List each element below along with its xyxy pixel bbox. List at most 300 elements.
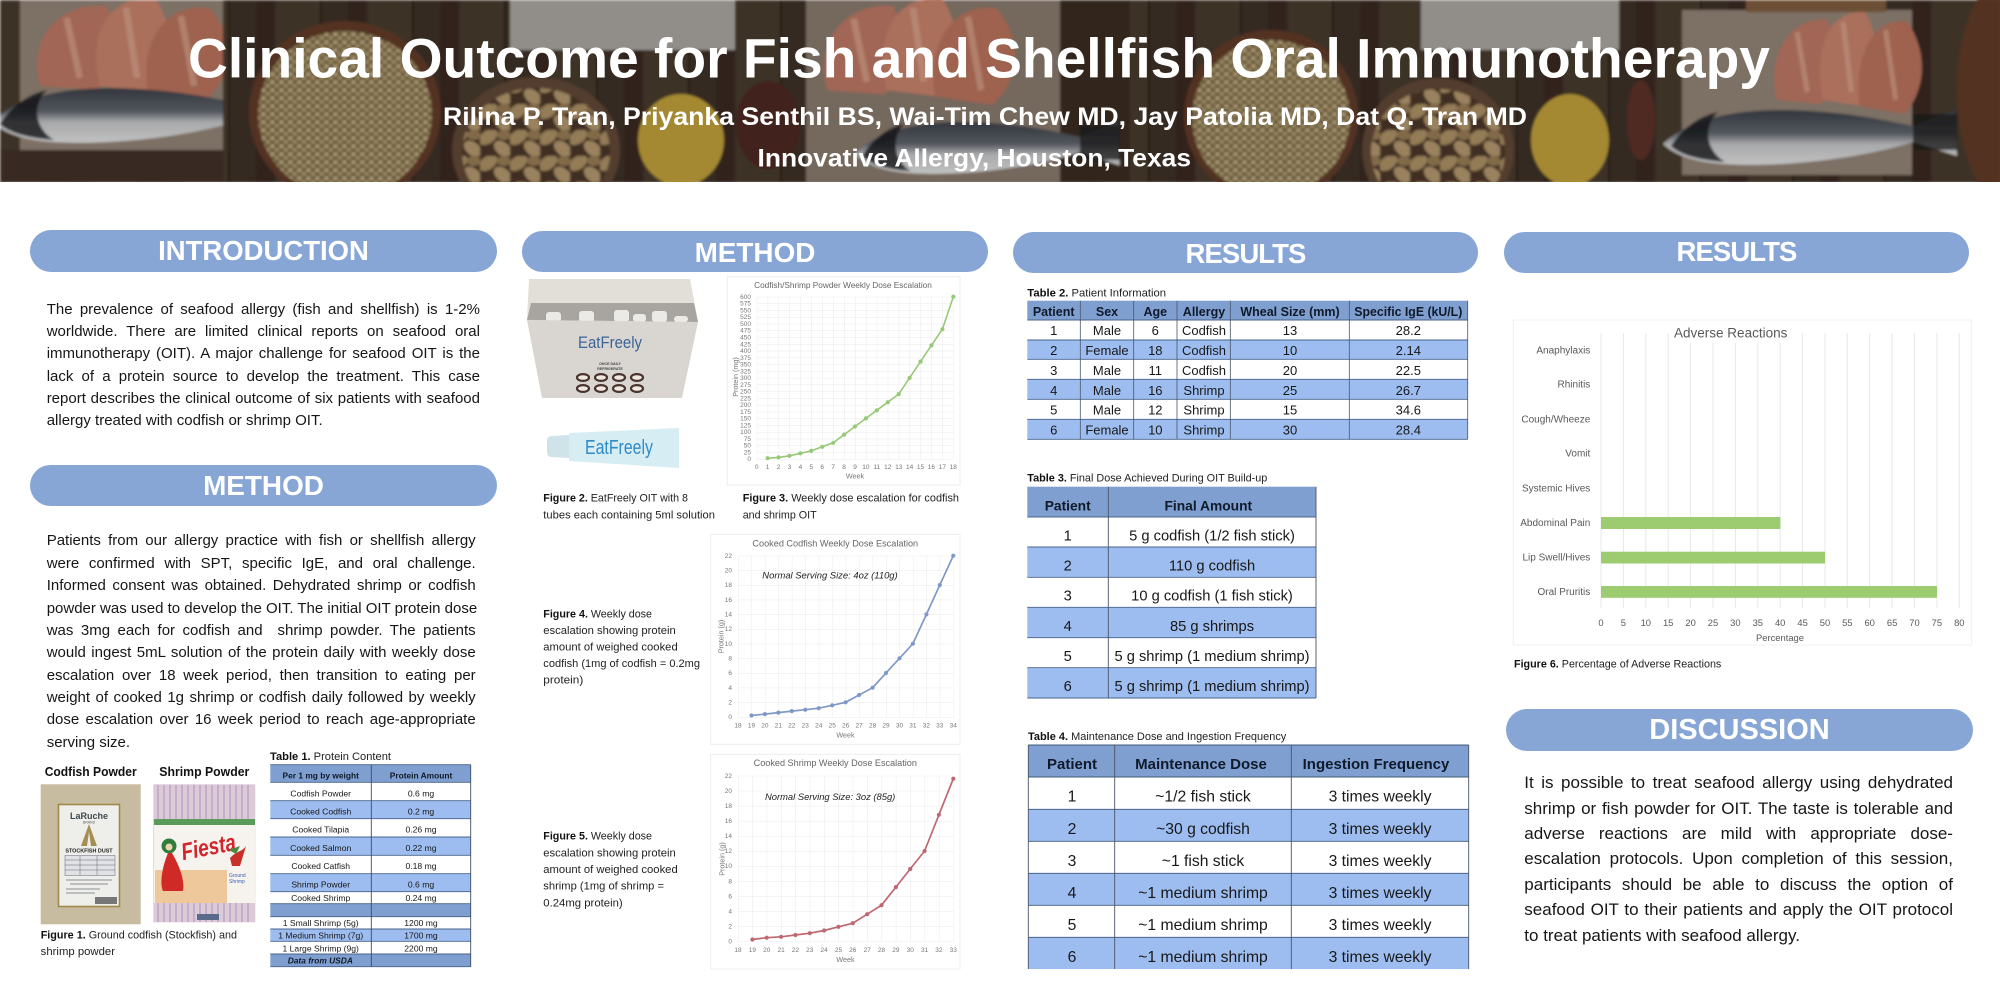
table 2: patient information: 15: [1283, 403, 1297, 418]
x axis labels: 31: [909, 722, 917, 729]
table 1: protein content: 1700 mg: [404, 931, 438, 941]
y axis labels: 20: [725, 788, 732, 795]
chart title: Adverse Reactions: [1674, 325, 1788, 340]
table 1: protein content: 0.26 mg: [405, 825, 437, 835]
table 4: maintenance dose and ingestion frequency: 2: [1068, 821, 1076, 838]
y axis labels: 50: [744, 443, 751, 450]
table 4: maintenance dose and ingestion frequency: ~1 fish stick: [1162, 853, 1244, 870]
tile 2 board, shrimp and fish: [804, 0, 1062, 182]
x axis labels: 9: [853, 464, 857, 471]
y axis labels: 12: [725, 626, 732, 633]
peanut bowl 1: [451, 76, 620, 182]
x axis labels: 30: [907, 947, 914, 954]
text block: discussion: shrimp or fish powder for OIT. The taste is tolerable and: [1524, 798, 1953, 818]
table 4: maintenance dose and ingestion frequency: 3 times weekly: [1329, 885, 1432, 902]
milk bottle 1: [510, 0, 735, 50]
text block: discussion: It is possible to treat seafood allergy using dehydrated: [1524, 773, 1953, 792]
table 1: protein content: [270, 751, 472, 968]
caption: figure 4: codfish (1mg of codfish = 0.2mg: [543, 658, 700, 670]
table 2: patient information: Allergy: [1183, 305, 1225, 319]
x axis labels: 60: [1864, 617, 1875, 628]
y axis labels: [725, 773, 732, 946]
y axis labels: 275: [740, 382, 751, 389]
table 1: protein content: 0.24 mg: [405, 893, 437, 903]
category labels: Cough/Wheeze: [1521, 414, 1591, 425]
axis titles: Week: [846, 472, 865, 481]
x axis labels: 10: [1641, 617, 1651, 628]
table 2: patient information: 6: [1050, 423, 1057, 438]
annotation: serving size: Normal Serving Size: 3oz (85g): [765, 792, 895, 803]
caption: figure 3: Figure 3. Weekly dose escalation for codfish: [743, 493, 959, 505]
text block: introduction: report describes the clinical outcome of six patients with seafood: [47, 390, 480, 407]
table 1: protein content: 0.22 mg: [405, 843, 437, 853]
axis titles: [716, 620, 855, 739]
text block: discussion: escalation protocols. Upon completion of this session,: [1524, 849, 1953, 868]
text block: method: Patients from our allergy practice with fish or shellfish allergy: [47, 532, 476, 549]
heading: introduction: [30, 230, 497, 272]
banner: food photo header with title: [0, 0, 2000, 182]
caption: figure 4: escalation showing protein: [543, 625, 676, 637]
text block: method: powder was used to develop the OIT. The initial OIT protein dose: [47, 600, 477, 617]
table 1: protein content: Cooked Catfish: [291, 861, 350, 871]
heading: method, left column: [30, 465, 497, 506]
table 3: final dose achieved: Table 3. Final Dose Achieved During OIT Build-up: [1027, 473, 1267, 485]
x axis labels: 30: [896, 722, 903, 729]
table 2: patient information: 10: [1283, 343, 1297, 358]
y axis labels: 18: [725, 803, 732, 810]
text block: introduction: worldwide. There are limited clinical reports on seafood oral: [47, 323, 480, 340]
table 2: patient information: 25: [1283, 383, 1297, 398]
photo: box: [527, 279, 698, 398]
y axis labels: 475: [740, 328, 751, 335]
axis titles: Protein (g): [716, 620, 726, 653]
table 2: patient information: Patient: [1033, 305, 1075, 319]
photo: fiesta ground shrimp package: Shrimp: [229, 879, 245, 885]
y axis labels: 14: [725, 833, 732, 840]
table 2: patient information: Male: [1093, 363, 1121, 378]
table 1: protein content: Cooked Salmon: [290, 843, 351, 853]
photo: stockfish dust package: STOCKFISH DUST: [65, 848, 113, 854]
y axis labels: 100: [740, 429, 751, 436]
chart: figure 4 cooked codfish weekly dose escalation: [710, 534, 960, 745]
x axis labels: 2: [777, 464, 781, 471]
tile 1 board, shrimp and fish: [0, 0, 226, 182]
heading: results, third column: RESULTS: [1185, 238, 1306, 269]
caption: figure 2: [543, 493, 715, 521]
y axis labels: 14: [725, 612, 732, 619]
x axis labels: 25: [1708, 617, 1718, 628]
category labels: Anaphylaxis: [1536, 345, 1590, 356]
table 1: protein content: Data from USDA: [288, 956, 353, 966]
caption: figure 1: Figure 1. Ground codfish (Stockfish) and: [41, 929, 237, 941]
line series: [752, 556, 953, 716]
axis titles: [731, 357, 865, 481]
x axis labels: 16: [928, 464, 935, 471]
x axis labels: 26: [849, 947, 857, 954]
photo: fiesta ground shrimp package: Fiesta: [179, 829, 238, 866]
text block: method: Informed consent was obtained. Dehydrated shrimp or codfish: [47, 577, 476, 594]
table 2: patient information: 11: [1149, 363, 1162, 378]
y axis labels: 600: [740, 294, 751, 301]
soy bowl 2: [1183, 29, 1358, 182]
y axis labels: 6: [728, 670, 732, 677]
x axis labels: 10: [862, 464, 870, 471]
x axis labels: 8: [842, 464, 846, 471]
x axis labels: 22: [788, 722, 796, 729]
x axis labels: 29: [882, 722, 890, 729]
chart title: Codfish/Shrimp Powder Weekly Dose Escalation: [754, 281, 932, 290]
table 2: patient information: 28.2: [1396, 323, 1421, 338]
y axis labels: 200: [740, 402, 751, 409]
x axis labels: 0: [755, 464, 759, 471]
category labels: Systemic Hives: [1522, 483, 1590, 494]
x axis labels: 22: [792, 947, 799, 954]
table 2: patient information: 20: [1283, 363, 1297, 378]
y axis labels: [740, 294, 751, 463]
text block: method: escalation over 18 week period, then transition to eating per: [47, 667, 476, 684]
y axis labels: 525: [740, 314, 751, 321]
x axis labels: 21: [777, 947, 785, 954]
table 3: final dose achieved: 4: [1064, 619, 1072, 635]
table 3: final dose achieved: 10 g codfish (1 fish stick): [1131, 589, 1293, 605]
x axis labels: [1598, 617, 1965, 643]
text block: discussion: to treat patients with seafood allergy.: [1524, 926, 1800, 945]
table 1: protein content: Protein Amount: [390, 770, 452, 780]
table 2: patient information: Male: [1093, 403, 1121, 418]
table 4: maintenance dose and ingestion frequency: Ingestion Frequency: [1303, 756, 1450, 773]
y axis labels: 8: [728, 878, 732, 885]
y axis labels: 125: [740, 422, 751, 429]
photo: stockfish dust package: [41, 784, 141, 924]
x axis labels: 70: [1909, 617, 1920, 628]
table 3: final dose achieved: 5: [1064, 649, 1072, 665]
caption: figure 5: 0.24mg protein): [543, 897, 623, 909]
table 2: patient information: Shrimp: [1183, 403, 1225, 418]
x axis labels: 20: [763, 947, 771, 954]
photo: stockfish dust package: LaRuche: [70, 811, 108, 821]
table 1: protein content: Cooked Codfish: [290, 807, 351, 817]
y axis labels: 425: [740, 341, 751, 348]
x axis labels: 17: [939, 464, 946, 471]
table 2: patient information: Wheal Size (mm): [1240, 305, 1340, 319]
photo: fiesta ground shrimp package: [153, 784, 255, 922]
text block: discussion: participants should be able to discuss the option of: [1524, 875, 1953, 894]
table 4: maintenance dose and ingestion frequency: ~30 g codfish: [1156, 821, 1250, 838]
caption: figure 2: Figure 2. EatFreely OIT with 8: [543, 493, 688, 505]
table 2: patient information: Age: [1143, 305, 1167, 319]
text block: method: [46, 532, 477, 751]
table 1: protein content: 1 Medium Shrimp (7g): [278, 931, 363, 941]
x axis labels: 35: [1753, 617, 1763, 628]
text block: method: would ingest 5mL solution of the protein daily with weekly dose: [47, 644, 476, 661]
y axis labels: [725, 553, 732, 721]
table 4: maintenance dose and ingestion frequency: ~1 medium shrimp: [1138, 885, 1268, 902]
table 2: patient information: Table 2. Patient Information: [1027, 288, 1166, 300]
y axis labels: 0: [728, 714, 732, 721]
caption: figure 4: Figure 4. Weekly dose: [543, 608, 652, 620]
x axis labels: 45: [1797, 617, 1808, 628]
x axis labels: 21: [775, 722, 782, 729]
chart: figure 5 cooked shrimp weekly dose escalation: [710, 754, 960, 970]
table 2: patient information: [1027, 288, 1468, 440]
bars: [1601, 517, 1937, 598]
x axis labels: 29: [892, 947, 900, 954]
x axis labels: 12: [884, 464, 892, 471]
table 1: protein content: Codfish Powder: [290, 788, 351, 798]
table 3: final dose achieved: 3: [1064, 589, 1072, 605]
heading: method, second column: [522, 231, 988, 272]
line series: [752, 779, 953, 940]
y axis labels: 4: [728, 908, 732, 915]
table 1: protein content: Shrimp Powder: [291, 879, 350, 889]
caption: figure 5: amount of weighed cooked: [543, 864, 678, 876]
heading: results, fourth column: RESULTS: [1676, 236, 1796, 267]
x axis labels: 23: [802, 722, 809, 729]
table 3: final dose achieved: 110 g codfish: [1169, 559, 1255, 575]
figure 2: EatFreely box and tube: [527, 279, 715, 521]
table 2: patient information: Female: [1085, 423, 1129, 438]
table 4: maintenance dose and ingestion frequency: 3 times weekly: [1329, 789, 1432, 806]
table 3: final dose achieved: 5 g shrimp (1 medium shrimp): [1114, 679, 1310, 695]
table 2: patient information: Male: [1093, 383, 1121, 398]
x axis labels: 6: [820, 464, 824, 471]
x axis labels: [734, 947, 957, 954]
table 4: maintenance dose and ingestion frequency: 5: [1068, 917, 1077, 934]
table 2: patient information: 2.14: [1396, 343, 1421, 358]
milk bottle 2: [1421, 0, 1619, 50]
y axis labels: 300: [740, 375, 751, 382]
table 3: final dose achieved: Patient: [1045, 498, 1091, 513]
x axis labels: 26: [842, 722, 850, 729]
caption: figure 4: amount of weighed cooked: [543, 642, 678, 654]
x axis labels: 75: [1932, 617, 1942, 628]
x axis labels: 5: [1621, 617, 1626, 628]
y axis labels: 575: [740, 301, 751, 308]
table 3: final dose achieved: 6: [1064, 679, 1072, 695]
heading: discussion: DISCUSSION: [1649, 714, 1830, 746]
axis titles: [718, 842, 855, 964]
table 3: final dose achieved: Final Amount: [1164, 498, 1253, 513]
x axis labels: 24: [815, 722, 823, 729]
y axis labels: 18: [725, 582, 732, 589]
x axis labels: 33: [950, 947, 957, 954]
y axis labels: 325: [740, 368, 751, 375]
y axis labels: 2: [728, 923, 732, 930]
x axis labels: 18: [734, 722, 742, 729]
table 2: patient information: 16: [1148, 383, 1163, 398]
x axis labels: 19: [748, 722, 755, 729]
nuts 1: [736, 81, 800, 169]
text block: method: was 3mg each for codfish and shrimp powder. The patients: [47, 622, 476, 639]
table 4: maintenance dose and ingestion frequency: 6: [1068, 949, 1077, 966]
x axis labels: 28: [878, 947, 885, 954]
y axis labels: 225: [740, 395, 751, 402]
table 2: patient information: 22.5: [1396, 363, 1421, 378]
table 2: patient information: Shrimp: [1183, 423, 1225, 438]
x axis labels: 34: [950, 722, 957, 729]
x axis labels: 40: [1775, 617, 1785, 628]
category labels: Oral Pruritis: [1538, 587, 1590, 598]
food photo background: [0, 0, 2000, 182]
table 1: protein content: Table 1. Protein Content: [270, 751, 392, 763]
x axis labels: 30: [1730, 617, 1741, 628]
category labels: Vomit: [1565, 449, 1591, 460]
table 3: final dose achieved: 5 g shrimp (1 medium shrimp): [1114, 649, 1310, 665]
y axis labels: 550: [740, 307, 751, 314]
table 1: protein content: 0.2 mg: [408, 807, 434, 817]
table 4: maintenance dose and ingestion frequency: 4: [1068, 885, 1077, 902]
x axis labels: [734, 722, 957, 729]
y axis labels: 6: [728, 893, 732, 900]
photo: box: ONCE DAILY: [599, 362, 622, 366]
caption: figure 5: [543, 831, 678, 909]
text block: method: were confirmed with SPT, specific IgE, and oral challenge.: [47, 555, 476, 572]
table 3: final dose achieved: [1027, 473, 1316, 698]
x axis labels: 3: [788, 464, 792, 471]
table 2: patient information: Specific IgE (kU/L): [1354, 305, 1462, 319]
authors: Rilina P. Tran, Priyanka Senthil BS, Wai-Tim Chew MD, Jay Patolia MD, Dat Q. Tran MD: [443, 103, 1527, 131]
label: codfish powder: Codfish Powder: [45, 765, 137, 779]
table 2: patient information: 26.7: [1396, 383, 1421, 398]
table 2: patient information: 13: [1283, 323, 1297, 338]
text block: introduction: immunotherapy (OIT). A major challenge for seafood OIT is the: [47, 345, 480, 362]
table 2: patient information: 10: [1148, 423, 1163, 438]
axis titles: Week: [836, 730, 855, 739]
caption: figure 4: [543, 608, 700, 687]
caption: figure 1: shrimp powder: [41, 946, 115, 958]
x axis labels: 7: [831, 464, 835, 471]
chart: figure 3 powder weekly dose escalation: [727, 276, 960, 486]
table 2: patient information: Male: [1093, 323, 1121, 338]
x axis labels: 18: [734, 947, 742, 954]
y axis labels: 25: [744, 449, 751, 456]
title: Clinical Outcome for Fish and Shellfish Oral Immunotherapy: [188, 26, 1770, 89]
table 4: maintenance dose and ingestion frequency: ~1/2 fish stick: [1155, 789, 1251, 806]
soy bowl 1: [248, 20, 442, 182]
heading: method, left column: METHOD: [203, 470, 324, 501]
x axis labels: 25: [835, 947, 842, 954]
x axis labels: 65: [1887, 617, 1897, 628]
x axis labels: 0: [1598, 617, 1604, 628]
table 4: maintenance dose and ingestion frequency: 3 times weekly: [1329, 853, 1432, 870]
text block: discussion: seafood OIT to their patients and apply the OIT protocol: [1524, 900, 1953, 919]
table 1: protein content: 1 Large Shrimp (9g): [282, 943, 359, 953]
y axis labels: 350: [740, 362, 751, 368]
table 4: maintenance dose and ingestion frequency: 1: [1068, 789, 1076, 806]
category labels: [1520, 345, 1591, 598]
text block: method: weight of cooked 1g shrimp or codfish daily followed by weekly: [47, 689, 476, 706]
y axis labels: 75: [744, 436, 751, 443]
x axis labels: 11: [873, 464, 881, 471]
category labels: Abdominal Pain: [1520, 518, 1590, 529]
table 2: patient information: 3: [1050, 363, 1057, 378]
table 2: patient information: 12: [1148, 403, 1163, 418]
y axis labels: 400: [740, 348, 751, 355]
table 4: maintenance dose and ingestion frequency: Table 4. Maintenance Dose and Ingestion Frequency: [1028, 731, 1287, 743]
table 2: patient information: Female: [1085, 343, 1129, 358]
table 4: maintenance dose and ingestion frequency: Maintenance Dose: [1135, 756, 1267, 773]
x axis labels: 20: [1685, 617, 1696, 628]
x axis labels: 1: [766, 464, 770, 471]
text block: discussion: [1524, 773, 1953, 945]
x axis labels: 14: [906, 464, 914, 471]
caption: figure 3: and shrimp OIT: [743, 509, 817, 521]
y axis labels: 4: [728, 685, 732, 692]
table 4: maintenance dose and ingestion frequency: ~1 medium shrimp: [1138, 917, 1268, 934]
table 2: patient information: Codfish: [1182, 363, 1226, 378]
caption: figure 3: [743, 493, 959, 521]
table 2: patient information: 28.4: [1396, 423, 1421, 438]
y axis labels: 12: [725, 848, 732, 855]
table 3: final dose achieved: 2: [1064, 559, 1072, 575]
heading: discussion: [1506, 709, 1973, 751]
chart: figure 6 adverse reactions bar chart: [1513, 320, 1972, 646]
table 4: maintenance dose and ingestion frequency: [1028, 731, 1470, 969]
heading: method, second column: METHOD: [695, 237, 815, 268]
table 1: protein content: 1200 mg: [404, 918, 438, 928]
x axis labels: 27: [855, 722, 863, 729]
x axis labels: 27: [864, 947, 871, 954]
y axis labels: 16: [725, 597, 732, 604]
x axis labels: 5: [809, 464, 813, 471]
table 1: protein content: 0.18 mg: [405, 861, 437, 871]
x axis labels: 32: [923, 722, 930, 729]
table 1: protein content: 0.6 mg: [408, 788, 434, 798]
y axis labels: 22: [725, 553, 732, 560]
x axis labels: [755, 464, 957, 471]
text block: introduction: lack of a protein source to develop the treatment. This case: [47, 368, 480, 385]
x axis labels: 55: [1842, 617, 1853, 628]
table 2: patient information: 34.6: [1396, 403, 1421, 418]
x axis labels: 28: [869, 722, 877, 729]
photo: tube: [547, 428, 679, 468]
table 1: protein content: Per 1 mg by weight: [283, 770, 359, 780]
table 2: patient information: Sex: [1096, 305, 1118, 319]
table 4: maintenance dose and ingestion frequency: ~1 medium shrimp: [1138, 949, 1268, 966]
y axis labels: 10: [725, 641, 732, 648]
x axis labels: 4: [799, 464, 803, 471]
table 4: maintenance dose and ingestion frequency: Patient: [1047, 756, 1097, 773]
y axis labels: 0: [747, 456, 751, 463]
x axis labels: 24: [820, 947, 828, 954]
x axis labels: 20: [761, 722, 769, 729]
axis titles: Protein (mg): [731, 357, 740, 397]
y axis labels: 150: [740, 416, 751, 423]
caption: figure 1: [41, 929, 237, 958]
table 2: patient information: Codfish: [1182, 343, 1226, 358]
x axis labels: 15: [917, 464, 924, 471]
table 4: maintenance dose and ingestion frequency: 3 times weekly: [1329, 917, 1432, 934]
table 2: patient information: Shrimp: [1183, 383, 1225, 398]
category labels: Rhinitis: [1558, 380, 1590, 391]
table 1: protein content: 2200 mg: [404, 943, 438, 953]
x axis labels: 31: [921, 947, 929, 954]
table 4: maintenance dose and ingestion frequency: 3: [1068, 853, 1077, 870]
caption: figure 5: escalation showing protein: [543, 847, 676, 859]
peanut bowl 2: [1361, 78, 1514, 182]
y axis labels: 8: [728, 656, 732, 662]
y axis labels: 10: [725, 863, 732, 870]
heading: results, fourth column: [1504, 232, 1969, 273]
x axis labels: 13: [895, 464, 903, 471]
axis titles: Week: [836, 955, 855, 964]
text block: method: dose escalation over 16 week period to reach age-appropriate: [47, 711, 476, 728]
x axis labels: 33: [936, 722, 944, 729]
table 2: patient information: 1: [1050, 323, 1057, 338]
table 4: maintenance dose and ingestion frequency: 3 times weekly: [1329, 949, 1432, 966]
x axis labels: 23: [806, 947, 814, 954]
text block: introduction: The prevalence of seafood allergy (fish and shellfish) is 1-2%: [47, 301, 480, 318]
